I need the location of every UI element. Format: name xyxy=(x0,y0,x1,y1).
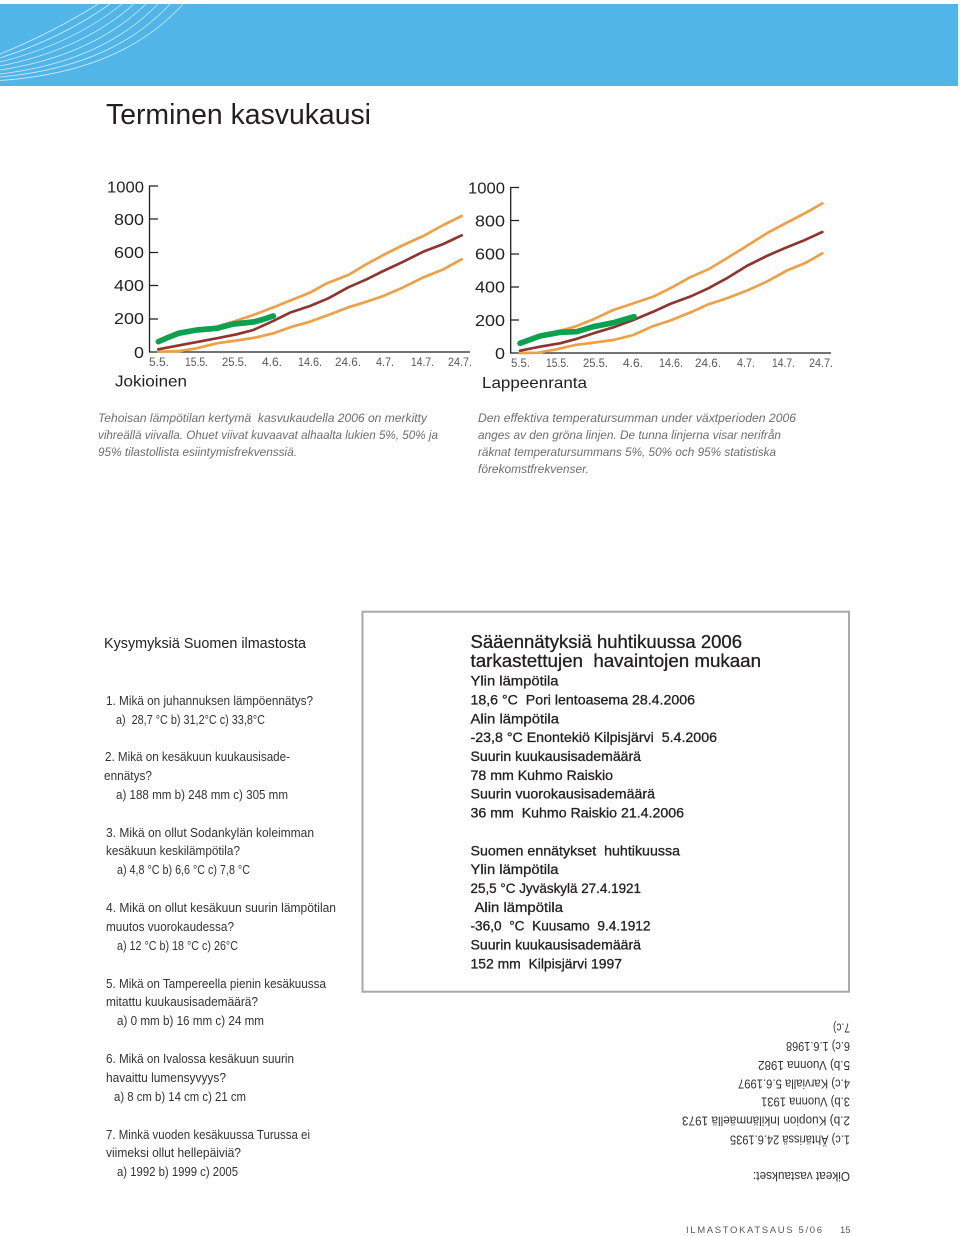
quiz questions: 6. Mikä on Ivalossa kesäkuun suurin xyxy=(106,1052,294,1066)
all-time April records: 152 mm Kilpisjärvi 1997 xyxy=(470,956,622,972)
records April 2006: Suurin kuukausisademäärä xyxy=(470,749,641,764)
x axis labels: 4.7. xyxy=(737,358,755,370)
upside-down answers: Oikeat vastaukset: xyxy=(753,1169,850,1183)
panel heading: tarkastettujen havaintojen mukaan xyxy=(470,651,761,671)
quiz questions: 2. Mikä on kesäkuun kuukausisade- xyxy=(105,750,290,764)
quiz questions: muutos vuorokaudessa? xyxy=(106,920,234,934)
x axis labels: 24.7. xyxy=(448,357,472,369)
quiz questions: a) 28,7 °C b) 31,2°C c) 33,8°C xyxy=(116,713,265,727)
y axis labels: 800 xyxy=(475,214,505,230)
x axis labels: 14.7. xyxy=(411,357,434,369)
upside-down answers: 1.c) Ähtärissä 24.6.1935 xyxy=(730,1132,850,1146)
upside-down answers: 6.c) 1.6.1968 xyxy=(786,1039,850,1053)
panel heading: Sääennätyksiä huhtikuussa 2006 xyxy=(470,632,742,652)
quiz questions: a) 12 °C b) 18 °C c) 26°C xyxy=(117,939,238,953)
chart: Lappeenranta xyxy=(468,180,833,392)
y axis labels: 0 xyxy=(495,346,505,363)
caption: Finnish xyxy=(98,413,438,459)
records April 2006: Ylin lämpötila xyxy=(470,674,559,688)
upside-down answers: 7.c) xyxy=(833,1020,850,1034)
quiz questions: kesäkuun keskilämpötila? xyxy=(106,844,240,858)
quiz questions: 5. Mikä on Tampereella pienin kesäkuussa xyxy=(106,977,326,991)
panel heading xyxy=(470,632,761,671)
quiz questions: a) 8 cm b) 14 cm c) 21 cm xyxy=(114,1090,246,1104)
records April 2006: 36 mm Kuhmo Raiskio 21.4.2006 xyxy=(470,806,684,820)
y axis labels: 1000 xyxy=(468,180,505,198)
caption: Swedish: räknat temperatursummans 5%, 50% och 95% statistiska xyxy=(478,447,776,459)
x axis labels: 24.7. xyxy=(809,358,833,370)
footer: 15 xyxy=(840,1225,850,1236)
upside-down answers: 2.b) Kuopion Inkilänmäellä 1973 xyxy=(682,1114,850,1128)
y axis labels xyxy=(107,180,144,362)
x axis labels: 14.7. xyxy=(772,358,795,370)
y axis labels: 1000 xyxy=(107,180,144,196)
y axis labels: 600 xyxy=(475,246,505,264)
panel: weather records xyxy=(362,612,849,992)
y axis labels: 400 xyxy=(114,278,144,295)
caption: Swedish xyxy=(478,413,797,476)
x axis labels: 24.6. xyxy=(335,357,361,369)
quiz questions: a) 4,8 °C b) 6,6 °C c) 7,8 °C xyxy=(117,863,250,877)
y axis labels: 600 xyxy=(114,245,144,262)
quiz questions: 7. Minkä vuoden kesäkuussa Turussa ei xyxy=(106,1128,310,1142)
x axis labels: 15.5. xyxy=(185,357,208,369)
caption: Finnish: vihreällä viivalla. Ohuet viivat kuvaavat alhaalta lukien 5%, 50% ja xyxy=(98,430,438,442)
upside-down answers: 5.b) Vuonna 1982 xyxy=(758,1058,850,1072)
header banner xyxy=(0,4,958,86)
upside-down answers: 3.b) Vuonna 1931 xyxy=(761,1094,850,1108)
x axis labels: 24.6. xyxy=(695,358,721,370)
records April 2006: Suurin vuorokausisademäärä xyxy=(470,786,656,802)
x axis labels: 14.6. xyxy=(659,358,683,370)
all-time April records: Ylin lämpötila xyxy=(470,862,559,877)
quiz questions: viimeksi ollut hellepäiviä? xyxy=(106,1146,241,1160)
x axis labels: 25.5. xyxy=(583,358,608,370)
x axis labels: 15.5. xyxy=(546,358,569,370)
all-time April records: Alin lämpötila xyxy=(474,900,564,915)
y axis labels: 200 xyxy=(114,311,144,328)
caption: Swedish: förekomstfrekvenser. xyxy=(478,464,589,476)
quiz questions: 3. Mikä on ollut Sodankylän koleimman xyxy=(106,826,314,840)
y axis labels: 0 xyxy=(134,345,144,362)
chart name: Lappeenranta xyxy=(482,375,587,392)
title: Terminen kasvukausi xyxy=(106,99,371,131)
y axis labels xyxy=(468,180,505,363)
all-time April records: Suomen ennätykset huhtikuussa xyxy=(470,844,681,858)
quiz questions: 4. Mikä on ollut kesäkuun suurin lämpötilan xyxy=(106,901,336,915)
axes xyxy=(511,188,831,353)
upside-down answers: 4.c) Karvialla 5.6.1997 xyxy=(738,1076,850,1090)
all-time April records: Suurin kuukausisademäärä xyxy=(470,938,641,952)
footer: ILMASTOKATSAUS 5/06 xyxy=(686,1225,822,1236)
caption: Swedish: Den effektiva temperatursumman under växtperioden 2006 xyxy=(478,413,797,425)
y axis labels: 200 xyxy=(475,313,505,330)
all-time April records xyxy=(470,844,681,972)
y axis labels: 800 xyxy=(114,212,144,229)
quiz questions xyxy=(104,694,336,1179)
caption: Finnish: Tehoisan lämpötilan kertymä kasvukaudella 2006 on merkitty xyxy=(98,413,428,425)
y axis labels: 400 xyxy=(475,280,505,296)
records April 2006: 18,6 °C Pori lentoasema 28.4.2006 xyxy=(470,692,695,708)
all-time April records: -36,0 °C Kuusamo 9.4.1912 xyxy=(470,918,650,934)
x axis labels: 5.5. xyxy=(149,357,169,369)
quiz heading: Kysymyksiä Suomen ilmastosta xyxy=(104,635,307,652)
quiz questions: havaittu lumensyvyys? xyxy=(106,1071,226,1085)
x axis labels: 4.7. xyxy=(376,357,394,369)
records April 2006: -23,8 °C Enontekiö Kilpisjärvi 5.4.2006 xyxy=(470,730,717,745)
x axis labels: 14.6. xyxy=(298,357,322,369)
upside-down answers xyxy=(682,1020,850,1183)
records April 2006: Alin lämpötila xyxy=(470,712,560,726)
all-time April records: 25,5 °C Jyväskylä 27.4.1921 xyxy=(470,881,641,896)
x axis labels: 4.6. xyxy=(623,358,643,370)
x axis labels xyxy=(149,357,472,369)
quiz questions: 1. Mikä on juhannuksen lämpöennätys? xyxy=(106,694,313,708)
records April 2006: 78 mm Kuhmo Raiskio xyxy=(470,768,613,783)
quiz questions: a) 1992 b) 1999 c) 2005 xyxy=(117,1165,238,1179)
quiz questions: ennätys? xyxy=(104,769,152,783)
quiz questions: a) 0 mm b) 16 mm c) 24 mm xyxy=(117,1014,264,1028)
chart name: Jokioinen xyxy=(115,374,187,390)
x axis labels: 25.5. xyxy=(222,357,247,369)
x axis labels: 4.6. xyxy=(262,357,282,369)
quiz questions: mitattu kuukausisademäärä? xyxy=(106,995,258,1009)
caption: Finnish: 95% tilastollista esiintymisfrekvenssiä. xyxy=(98,447,297,459)
records April 2006 xyxy=(470,674,717,820)
x axis labels: 5.5. xyxy=(511,358,530,370)
chart: Jokioinen xyxy=(107,180,472,390)
caption: Swedish: anges av den gröna linjen. De tunna linjerna visar nerifrån xyxy=(478,430,781,442)
axes xyxy=(150,186,470,352)
data lines xyxy=(158,216,462,352)
data lines xyxy=(520,203,822,353)
quiz questions: a) 188 mm b) 248 mm c) 305 mm xyxy=(116,788,288,802)
x axis labels xyxy=(511,358,833,370)
